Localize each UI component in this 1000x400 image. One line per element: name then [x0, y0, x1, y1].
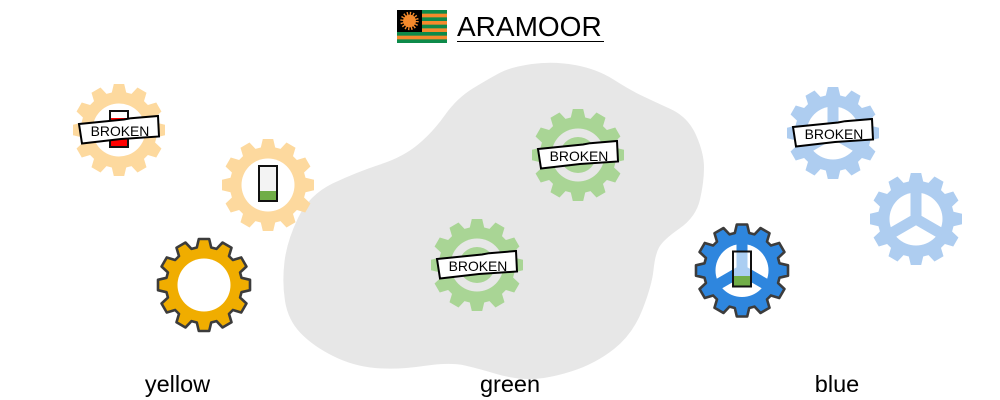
gear: yellow broken 1 [73, 84, 165, 176]
broken tag: BROKEN [91, 123, 149, 139]
gear: green broken 2 [431, 219, 523, 311]
gear: blue broken [787, 87, 879, 179]
broken tag: BROKEN [550, 148, 608, 164]
label: yellow: yellow [145, 371, 211, 397]
label: blue: blue [815, 371, 859, 397]
background blob: green region [283, 63, 704, 379]
title: ARAMOOR [457, 11, 602, 42]
label: green: green [480, 371, 540, 397]
flag [397, 10, 447, 43]
gear: green broken 1 [532, 109, 624, 201]
broken tag: BROKEN [449, 258, 507, 274]
gear: yellow active [158, 239, 250, 331]
battery: green level [259, 166, 277, 201]
gear: yellow 2 with battery [222, 139, 314, 231]
gear: blue light [870, 173, 962, 265]
battery: green level [733, 252, 751, 286]
battery: red [110, 111, 128, 147]
broken tag: BROKEN [805, 126, 863, 142]
gear: blue active with battery [696, 224, 788, 316]
